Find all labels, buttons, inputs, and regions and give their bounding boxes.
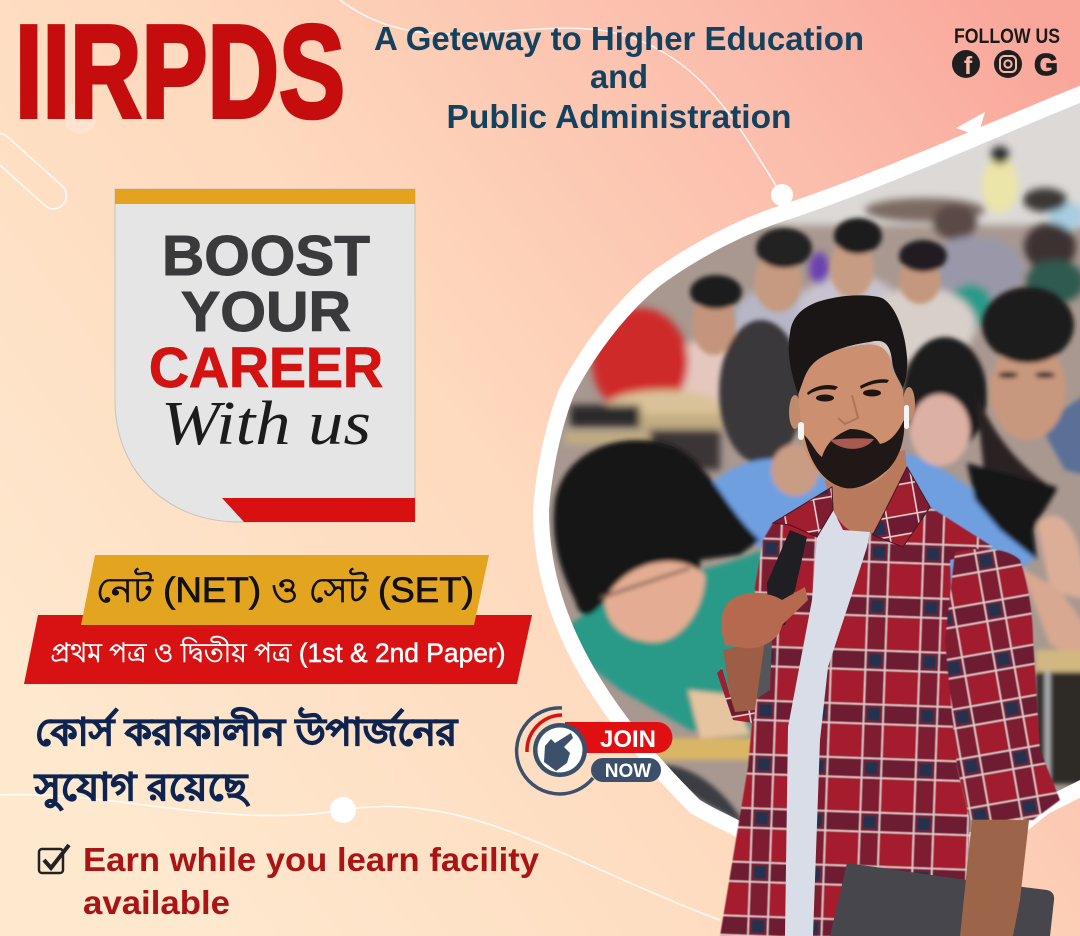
man: bag strap: [767, 530, 807, 625]
bengali subheading: সুযোগ রয়েছে: [33, 767, 250, 812]
join pill: [565, 722, 672, 753]
bengali subheading: কোর্স করাকালীন উপার্জনের: [35, 707, 458, 754]
man: neck: [822, 450, 907, 534]
red banner: [24, 615, 532, 684]
headline: [374, 20, 864, 135]
now pill: NOW: [605, 761, 651, 782]
man: t-shirt: [785, 510, 870, 936]
man: hair: [789, 295, 907, 395]
earn text: [83, 841, 540, 921]
icon: instagram: [994, 50, 1022, 78]
follow us: [952, 25, 1060, 82]
right desk: [1036, 650, 1080, 784]
earn text: Earn while you learn facility: [83, 841, 540, 878]
card text: BOOST: [162, 224, 370, 288]
man: brows and eyes: [807, 379, 889, 402]
headline: A Geteway to Higher Education: [374, 20, 864, 57]
man: right forearm: [960, 820, 1029, 936]
man: left forearm: [723, 640, 765, 714]
decorative dots: [330, 112, 985, 823]
student: man right: [1040, 395, 1080, 475]
man: beard: [804, 420, 904, 488]
headline: Public Administration: [446, 98, 792, 135]
man: face: [798, 345, 905, 488]
logo title: IIRPDS: [15, 0, 345, 145]
icon: facebook: f: [964, 52, 973, 80]
student: girl in teal: [556, 550, 762, 738]
icon: google: G: [1034, 47, 1058, 82]
man: bag strap lower: [752, 640, 772, 702]
man: ears: [789, 387, 915, 429]
boost card: [115, 189, 415, 522]
card text: CAREER: [149, 336, 383, 400]
icon: hand in ring: [517, 708, 593, 794]
man: collars: [773, 467, 930, 547]
join pill: JOIN: [600, 726, 656, 753]
bengali subheading: [33, 707, 458, 812]
back row faces: [690, 218, 947, 355]
man: rolled cuff: [717, 668, 755, 723]
headline: and: [590, 58, 648, 95]
gold banner: নেট (NET) ও সেট (SET): [96, 568, 474, 610]
card text: [149, 224, 383, 400]
man: smile: [830, 438, 874, 449]
join now button: [517, 708, 672, 794]
card script text: With us: [161, 390, 371, 458]
now pill: [591, 758, 661, 782]
student: woman right: [903, 337, 987, 453]
photo: exam hall students: [530, 90, 1080, 850]
man: [717, 295, 1060, 936]
decorative curves: [0, 0, 782, 920]
man: nose shadow: [838, 395, 858, 424]
icon: checkbox: [39, 845, 69, 873]
student: back-of-head: [719, 320, 803, 464]
student: blue shirt: [709, 450, 1038, 592]
man: sleeve: [945, 549, 1060, 820]
man: earbuds: [798, 405, 909, 440]
card text: YOUR: [181, 280, 351, 344]
red banner: প্রথম পত্র ও দ্বিতীয় পত্র (1st & 2nd Paper): [50, 636, 506, 668]
man: laptop: [830, 863, 1054, 936]
follow us: FOLLOW US: [954, 25, 1060, 48]
man: shirt body: [720, 467, 993, 936]
earn text: available: [83, 884, 230, 921]
gold banner: [81, 555, 489, 625]
man: hand: [721, 587, 808, 648]
